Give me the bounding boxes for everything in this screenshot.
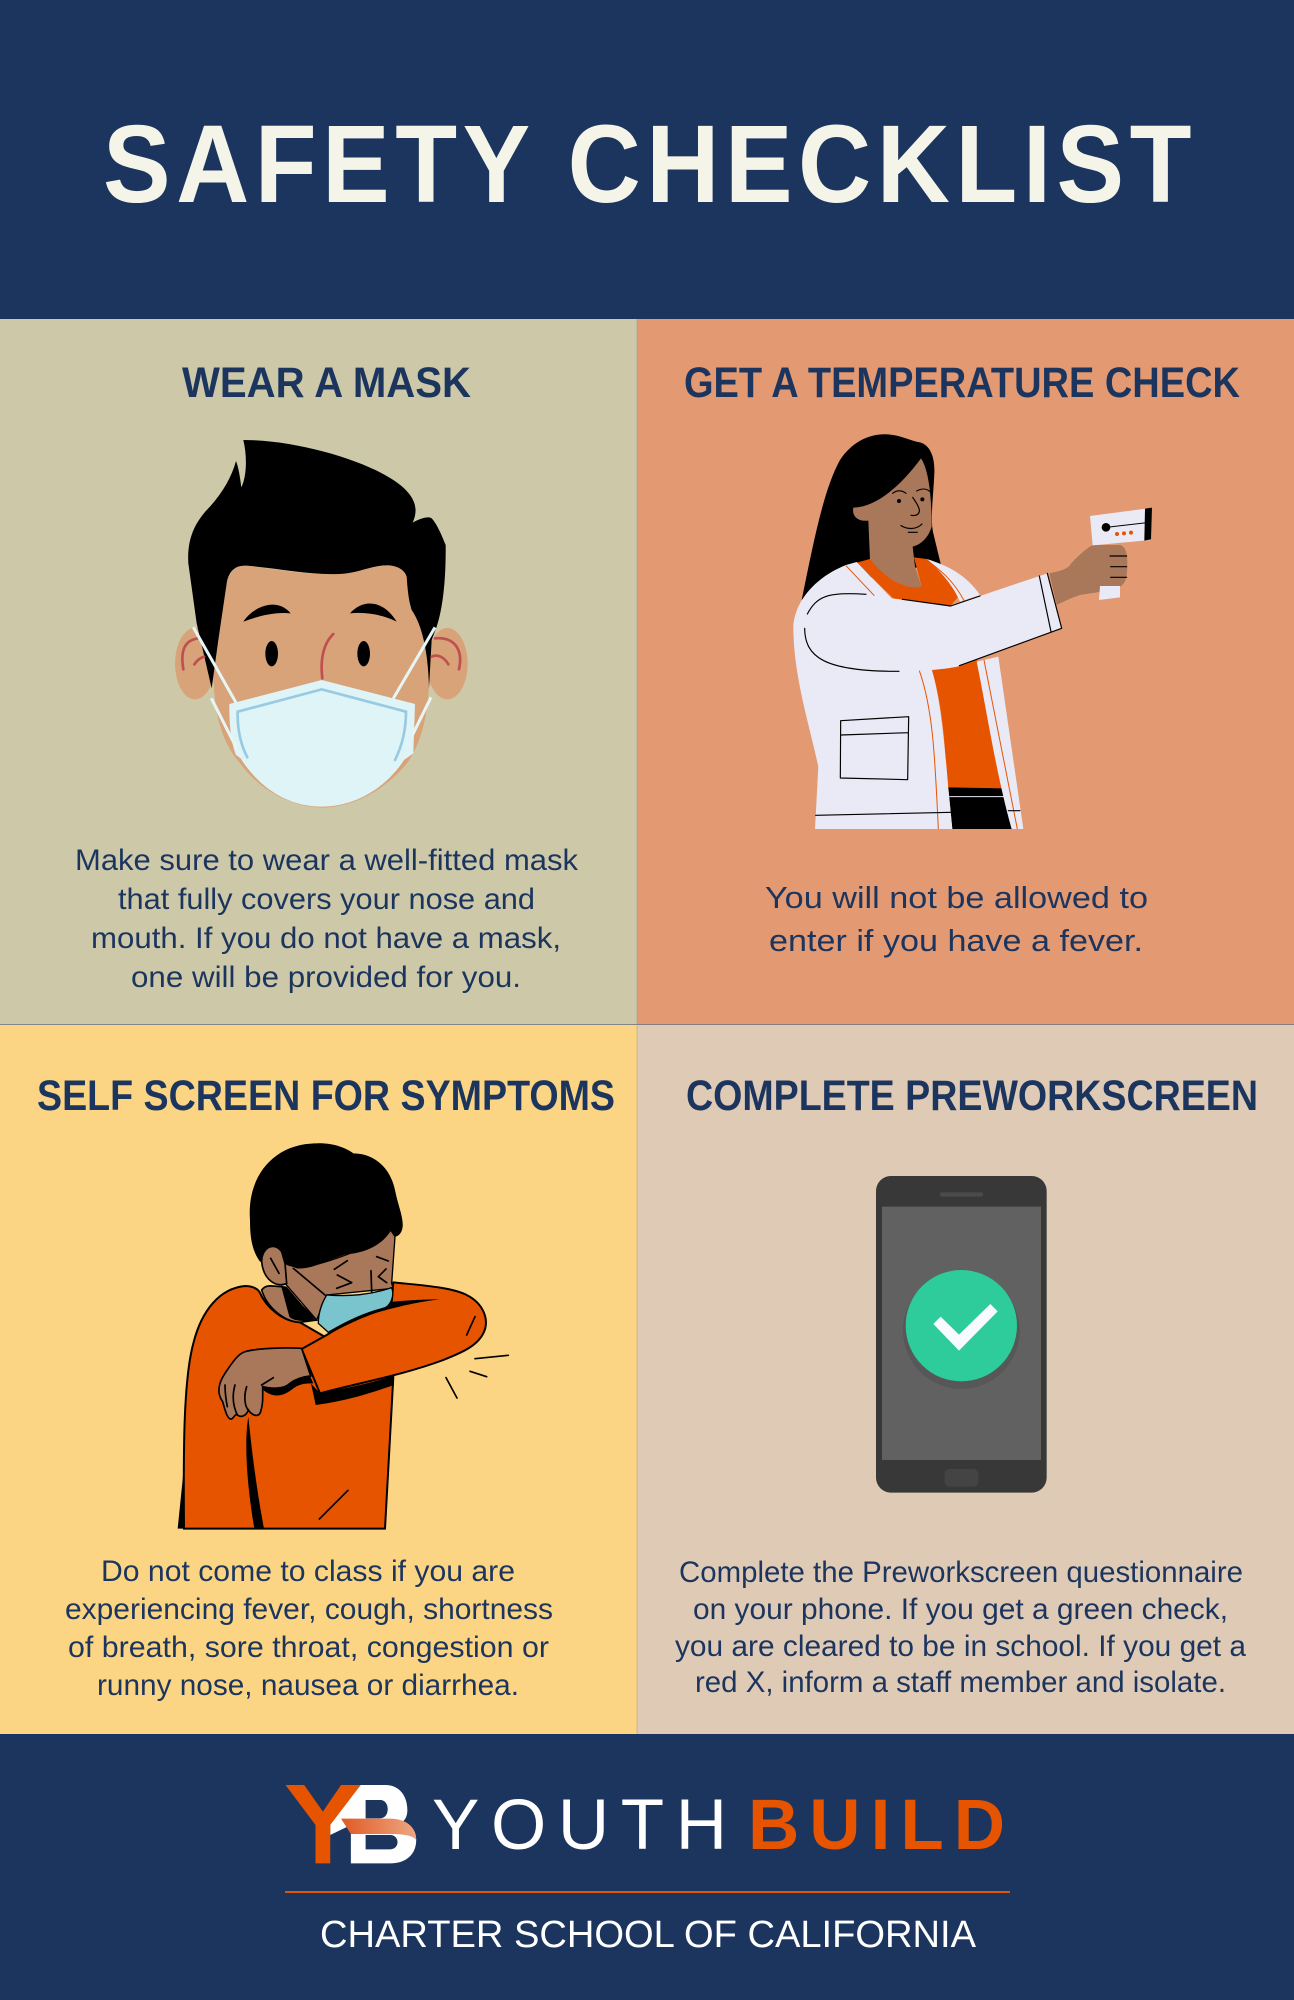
heading: self screen for symptoms: SELF SCREEN FOR SYMPTOMS — [37, 1072, 615, 1120]
icon: person coughing into elbow — [178, 1143, 508, 1529]
school name: CHARTER SCHOOL OF CALIFORNIA — [320, 1914, 977, 1956]
panel: complete preworkscreen — [637, 1025, 1294, 1734]
body text: preworkscreen: you are cleared to be in school. If you get a — [675, 1630, 1247, 1663]
icon: phone with green check — [876, 1176, 1047, 1493]
body text: symptoms: experiencing fever, cough, shortness — [65, 1593, 553, 1626]
body text: preworkscreen: on your phone. If you get a green check, — [693, 1593, 1228, 1626]
body text: symptoms — [65, 1555, 553, 1702]
body text: temperature check: You will not be allowed to — [765, 880, 1148, 915]
body text: preworkscreen: Complete the Preworkscreen questionnaire — [679, 1556, 1243, 1589]
panel: get a temperature check — [637, 319, 1294, 1025]
title: SAFETY CHECKLIST — [103, 103, 1197, 226]
body text: temperature check: enter if you have a fever. — [769, 923, 1143, 958]
body text: wear a mask — [75, 844, 578, 994]
body text: symptoms: Do not come to class if you are — [101, 1555, 515, 1588]
header band — [0, 0, 1294, 319]
body text: wear a mask: one will be provided for you. — [131, 961, 521, 994]
body text: wear a mask: mouth. If you do not have a mask, — [91, 922, 561, 955]
body text: wear a mask: that fully covers your nose and — [118, 883, 535, 916]
body text: preworkscreen: red X, inform a staff member and isolate. — [695, 1666, 1226, 1699]
body text: symptoms: of breath, sore throat, congestion or — [68, 1631, 549, 1664]
panel: self screen for symptoms — [0, 1025, 637, 1734]
body text: preworkscreen — [675, 1556, 1247, 1699]
logo text: BUILD: BUILD — [748, 1786, 1005, 1865]
logo text: YOUTH: YOUTH — [432, 1786, 727, 1865]
body text: symptoms: runny nose, nausea or diarrhea. — [97, 1669, 519, 1702]
footer band — [0, 1734, 1294, 2000]
icon: woman with thermometer — [793, 434, 1152, 829]
heading: wear a mask: WEAR A MASK — [182, 359, 471, 407]
body text: wear a mask: Make sure to wear a well-fitted mask — [75, 844, 578, 877]
logo mark: YB — [286, 1785, 416, 1863]
icon: man wearing mask — [175, 440, 468, 808]
body text: temperature check — [765, 880, 1148, 958]
panel: wear a mask — [0, 319, 637, 1025]
footer divider — [285, 1891, 1010, 1893]
